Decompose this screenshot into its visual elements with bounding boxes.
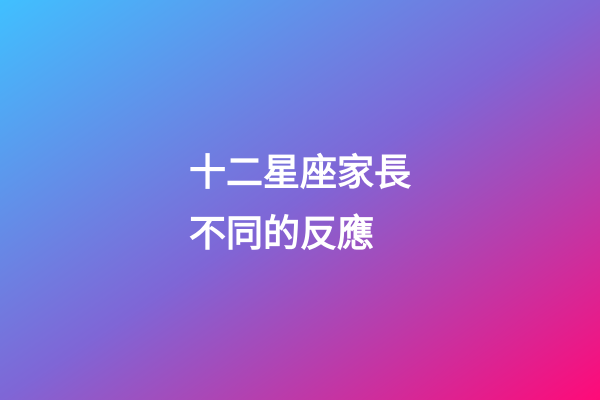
title: 不同的反應 xyxy=(189,213,374,254)
title xyxy=(189,152,412,254)
title: 十二星座家長 xyxy=(189,152,411,193)
